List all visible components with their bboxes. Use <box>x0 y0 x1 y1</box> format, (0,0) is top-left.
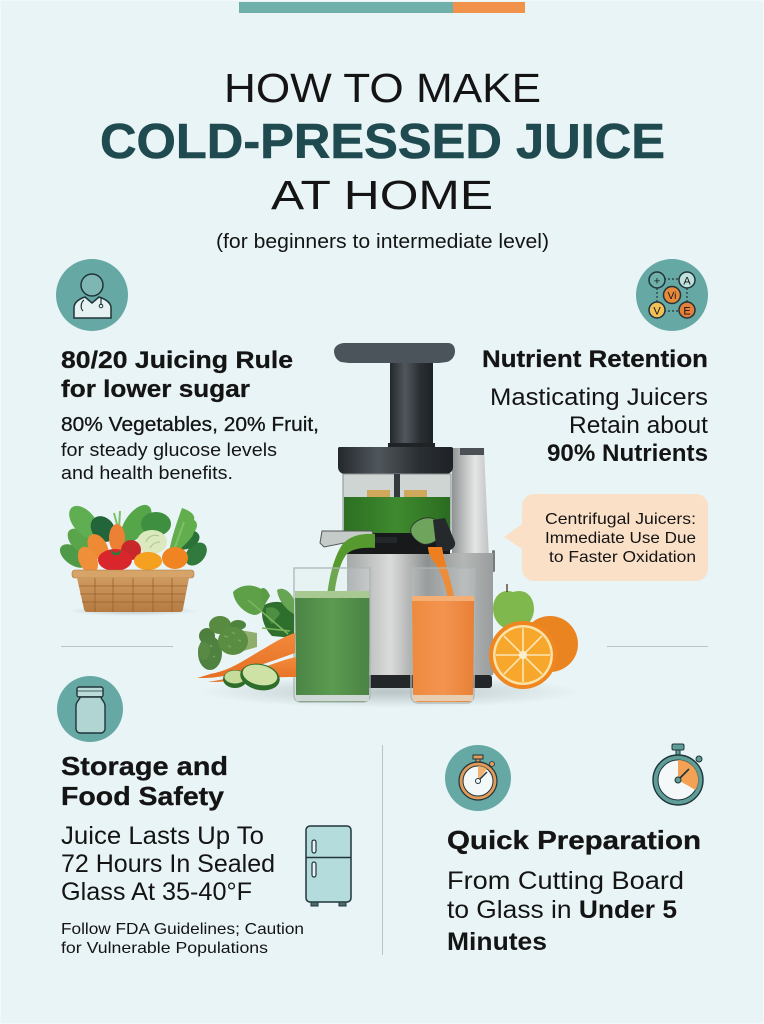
juicing chamber <box>338 447 453 554</box>
panel: nutrient retention <box>482 259 708 581</box>
pusher lid <box>334 343 455 449</box>
body text <box>61 822 275 906</box>
icon: stopwatch with orange wedge <box>653 744 703 805</box>
title: HOW TO MAKE <box>224 65 541 111</box>
icon: vitamins: V <box>653 306 661 318</box>
cucumber slices <box>223 660 282 694</box>
subtitle: (for beginners to intermediate level) <box>216 231 549 253</box>
icon: refrigerator <box>306 826 351 906</box>
body text: for steady glucose levels <box>61 439 277 460</box>
heading: Storage and <box>61 751 228 781</box>
juicer body <box>347 448 495 688</box>
callout: centrifugal juicers: Immediate Use Due <box>545 530 696 547</box>
title <box>100 65 665 218</box>
leafy greens <box>233 586 294 638</box>
body text <box>490 384 708 467</box>
icon: vegetable basket <box>56 500 211 616</box>
illustration: juicer with glasses and produce <box>197 343 580 708</box>
ground shadow <box>200 676 580 708</box>
body text: Juice Lasts Up To <box>61 822 264 850</box>
icon: vitamins: Vi <box>668 291 676 302</box>
icon: stopwatch in circle <box>445 745 511 811</box>
orange juice stream <box>428 547 455 600</box>
footnote <box>61 921 304 957</box>
body text: Glass At 35-40°F <box>61 878 252 906</box>
heading: 80/20 Juicing Rule <box>61 347 293 374</box>
body text: Minutes <box>447 928 547 956</box>
heading: Nutrient Retention <box>482 346 708 373</box>
footnote: Follow FDA Guidelines; Caution <box>61 921 304 938</box>
dividers <box>61 646 708 955</box>
body text: 72 Hours In Sealed <box>61 850 275 878</box>
icon: vitamins: E <box>683 306 691 318</box>
heading: Quick Preparation <box>447 825 701 855</box>
body text: Retain about <box>569 412 708 439</box>
broccoli <box>198 616 257 670</box>
callout: centrifugal juicers: to Faster Oxidation <box>549 549 696 566</box>
callout: centrifugal juicers <box>504 494 708 581</box>
icon: vitamins: A <box>683 276 691 288</box>
body text: to Glass in Under 5 <box>447 896 677 924</box>
panel: quick preparation <box>445 744 703 956</box>
icon: doctor <box>56 259 128 331</box>
body text <box>61 414 319 483</box>
heading <box>61 751 228 811</box>
green glass <box>294 568 370 702</box>
left spout <box>320 531 397 547</box>
title: COLD-PRESSED JUICE <box>100 115 665 169</box>
body text: Masticating Juicers <box>490 384 708 411</box>
right spout <box>411 518 455 551</box>
body text: 90% Nutrients <box>547 440 708 467</box>
heading: for lower sugar <box>61 376 250 403</box>
body text: 80% Vegetables, 20% Fruit, <box>61 414 319 436</box>
whole orange <box>522 616 578 672</box>
icon: mason jar <box>57 676 123 742</box>
body text: and health benefits. <box>61 462 233 483</box>
icon: vitamins <box>636 259 708 331</box>
orange slice <box>489 621 557 689</box>
body text <box>447 867 684 956</box>
panel: 80/20 juicing rule <box>56 259 319 616</box>
heading: Food Safety <box>61 781 225 811</box>
carrots <box>197 633 296 682</box>
orange glass <box>411 568 475 703</box>
body text: From Cutting Board <box>447 867 684 895</box>
green juice stream <box>327 534 375 597</box>
footnote: for Vulnerable Populations <box>61 940 268 957</box>
title: AT HOME <box>271 172 493 218</box>
icon: vitamins: + <box>654 276 660 288</box>
top accent bar <box>239 2 525 13</box>
apple <box>493 584 534 629</box>
heading <box>61 347 293 403</box>
panel: storage and food safety <box>57 676 351 957</box>
callout: centrifugal juicers: Centrifugal Juicers: <box>545 511 696 528</box>
